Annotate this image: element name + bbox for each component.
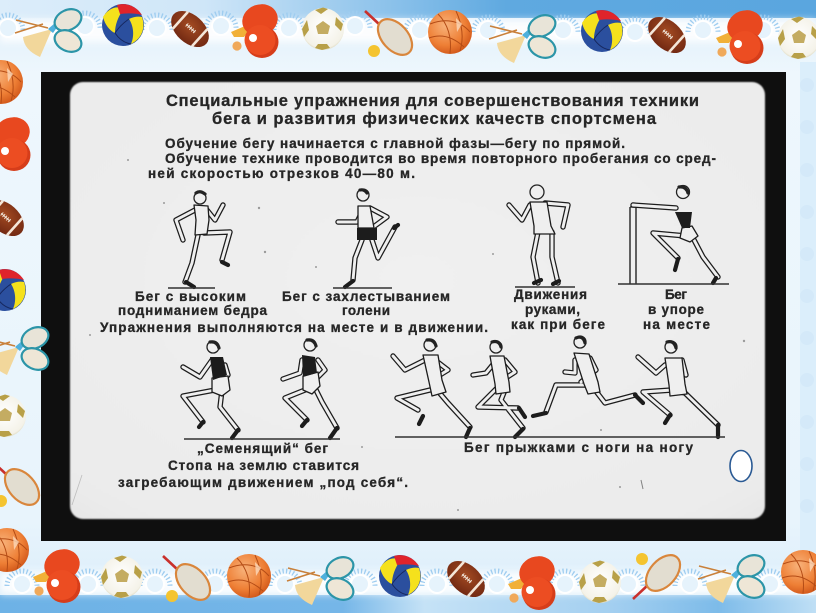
caption: shin sweep: голени: [342, 303, 390, 318]
icon: tennis racket: [633, 549, 687, 599]
icon: basketball: [0, 528, 29, 572]
caption: arm movements: [511, 287, 605, 332]
caption: high knee: Бег с высоким: [135, 289, 246, 304]
icon: tennis racket: [365, 11, 419, 61]
icon: shuttlecock and rackets: [698, 551, 768, 603]
caption: mincing run: загребающим движением „под себя“.: [118, 475, 408, 490]
caption: arm movements: Движения: [514, 287, 587, 302]
icon: soccer ball: [101, 556, 143, 598]
right side scallops: [800, 62, 816, 552]
icon: shuttlecock and rackets: [0, 323, 52, 375]
caption: mincing run: [118, 441, 408, 490]
intro text: ней скоростью отрезков 40—80 м.: [148, 166, 415, 181]
left sports icons: [0, 60, 52, 572]
icon: shuttlecock and rackets: [287, 553, 357, 605]
icon: table tennis: [231, 0, 282, 58]
figure: supported run at wall: [618, 186, 729, 284]
figures: mincing run: [183, 339, 340, 439]
top scalloped border: [0, 13, 778, 42]
icon: soccer ball: [579, 560, 621, 603]
caption: supported run: [643, 287, 710, 332]
caption: bounding run: Бег прыжками с ноги на ногу: [464, 440, 693, 455]
paper specks and scratches: [72, 159, 745, 511]
title: бега и развития физических качеств спортсмена: [212, 110, 657, 128]
caption: mincing run: „Семенящий“ бег: [197, 441, 328, 456]
oval marker: [730, 450, 752, 482]
icon: basketball: [0, 60, 23, 104]
icon: volleyball: [379, 555, 421, 597]
icon: american football: [440, 554, 492, 604]
figure: arm movements: [509, 185, 575, 287]
caption: supported run: на месте: [643, 317, 710, 332]
icon: basketball: [428, 10, 472, 54]
icon: basketball: [227, 554, 271, 598]
caption: mincing run: Стопа на землю ставится: [168, 458, 359, 473]
icon: tennis racket: [0, 461, 46, 511]
figure: high knee run: [168, 192, 230, 288]
icon: soccer ball: [302, 8, 344, 50]
caption: high knee: подниманием бедра: [118, 303, 267, 318]
icon: table tennis: [0, 112, 34, 171]
caption: shin sweep: [282, 289, 450, 318]
caption: supported run: Бег: [665, 287, 687, 302]
caption: arm movements: как при беге: [511, 317, 605, 332]
figure: shin sweep run: [333, 189, 398, 288]
icon: american football: [164, 4, 216, 54]
icon: shuttlecock and rackets: [489, 11, 559, 63]
top sports icons: [15, 0, 816, 64]
intro text: Обучение бегу начинается с главной фазы—бегу по прямой.: [165, 136, 625, 151]
figures: bounding run: [393, 336, 725, 437]
icon: table tennis: [33, 544, 84, 603]
intro text: Обучение технике проводится во время повторного пробегания со сред-: [165, 151, 716, 166]
slide text and drawings: [100, 92, 729, 490]
icon: volleyball: [0, 269, 26, 311]
icon: table tennis: [508, 551, 559, 610]
icon: volleyball: [581, 10, 623, 52]
icon: soccer ball: [0, 394, 26, 437]
caption: shin sweep: Бег с захлестыванием: [282, 289, 450, 304]
title: [166, 92, 699, 128]
aged paper sheet: [70, 82, 765, 519]
bottom scalloped border: [7, 571, 785, 594]
intro text: [148, 136, 716, 181]
bottom sports icons: [33, 544, 816, 610]
black slide frame: [41, 72, 786, 541]
icon: table tennis: [716, 5, 767, 64]
caption: supported run: в упоре: [648, 302, 704, 317]
icon: tennis racket: [163, 556, 217, 606]
icon: american football: [641, 10, 693, 60]
icon: volleyball: [102, 4, 144, 46]
bottom blue band: [0, 595, 816, 613]
icon: american football: [0, 193, 31, 243]
icon: soccer ball: [778, 16, 816, 59]
caption: arm movements: руками,: [525, 302, 580, 317]
caption: high knee: [118, 289, 267, 318]
top blue band: [0, 0, 816, 18]
caption: place and motion note: Упражнения выполняются на месте и в движении.: [100, 320, 488, 335]
title: Специальные упражнения для совершенствования техники: [166, 92, 699, 110]
icon: shuttlecock and rackets: [15, 5, 85, 57]
icon: basketball: [781, 550, 816, 594]
